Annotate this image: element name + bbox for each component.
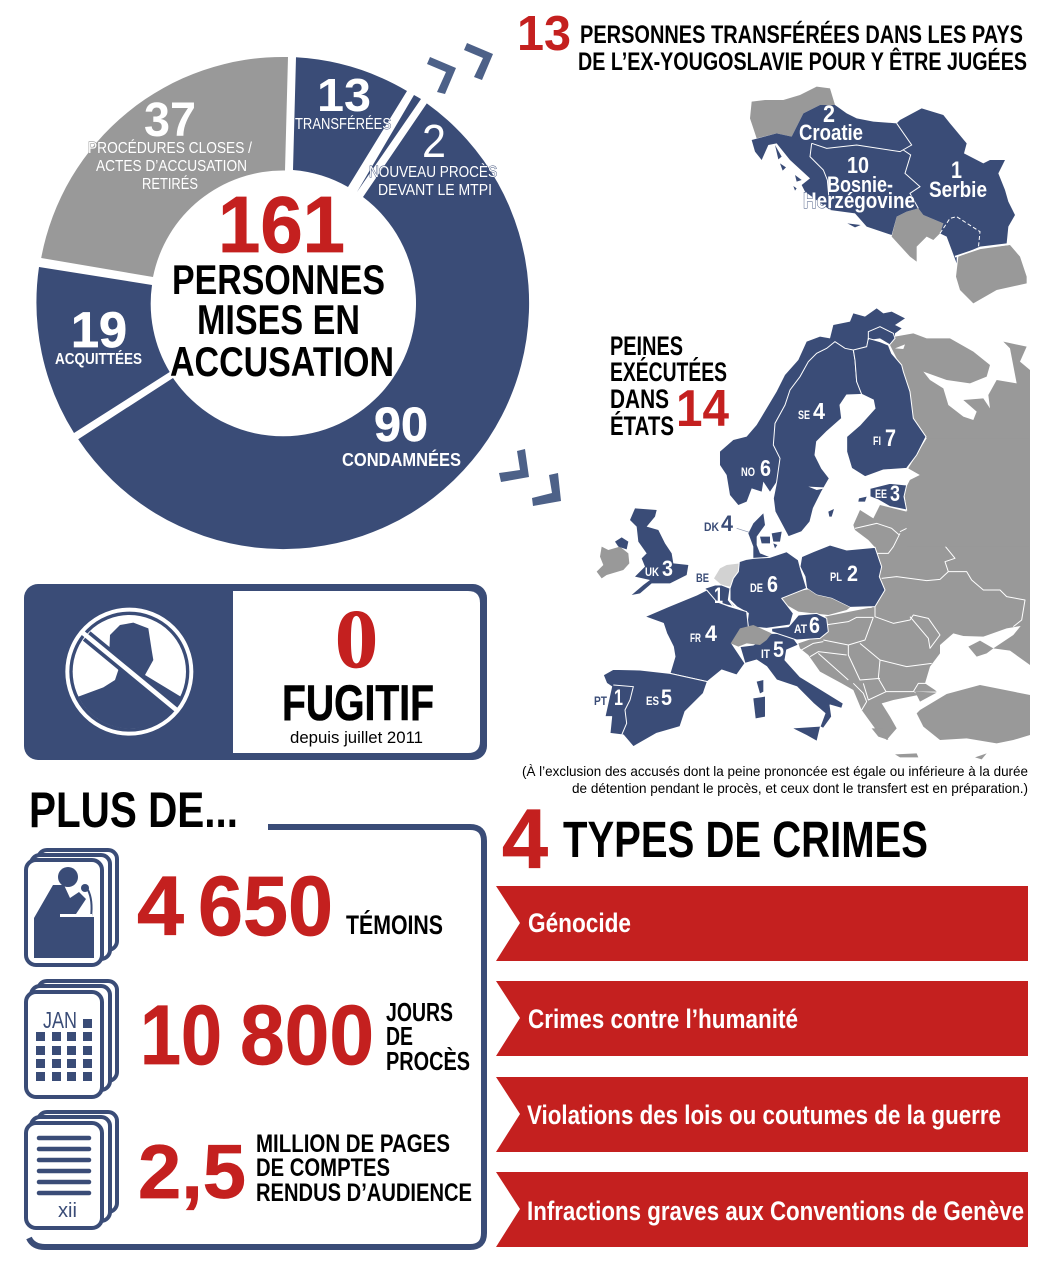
stat: jours de procès — [140, 988, 470, 1082]
country labels: BE — [696, 571, 709, 585]
label: Bosnie-Herzégovine — [803, 152, 915, 213]
country labels: EE — [875, 487, 887, 501]
segment: acquittées — [36, 267, 170, 433]
heading: peines exécutées dans 14 États — [610, 331, 729, 441]
stat: jours de procès: JOURS — [386, 997, 453, 1027]
stat: pages de comptes rendus: MILLION DE PAGES — [256, 1130, 450, 1158]
label: 19: ACQUITTÉES — [55, 349, 142, 368]
label: 19 — [55, 302, 142, 368]
stat: pages de comptes rendus: DE COMPTES — [256, 1154, 390, 1182]
country labels: FI — [873, 434, 881, 448]
label: 37 — [88, 94, 252, 193]
label: 13 — [295, 69, 391, 133]
Estonia — [870, 483, 907, 510]
banner: crimes contre l'humanité — [496, 981, 1028, 1056]
heading: 13 persons transferred: 13 — [517, 7, 571, 61]
label: Serbie: 1 — [951, 157, 962, 184]
label: 19: 19 — [71, 302, 127, 358]
stat: jours de procès: 10 — [140, 988, 222, 1082]
label: 2 — [369, 115, 497, 199]
heading: plus de: PLUS DE... — [29, 782, 238, 838]
segment: transférées — [293, 57, 407, 187]
country labels: 2 — [847, 561, 858, 586]
label: Bosnie-Herzégovine: Herzégovine — [803, 188, 915, 213]
country labels: DE — [750, 581, 763, 595]
country labels: 3 — [662, 556, 673, 581]
country labels — [594, 398, 900, 710]
country labels: 5 — [773, 637, 784, 662]
country labels: FR — [690, 631, 701, 645]
donut chart: 161 persons — [36, 57, 529, 549]
Finland — [847, 338, 926, 477]
stat: pages de comptes rendus — [138, 1130, 472, 1215]
banner: génocide — [496, 886, 1028, 961]
segment: nouveau procès — [357, 95, 421, 192]
country labels: 4 — [813, 398, 825, 424]
stat: témoins: 4 — [137, 859, 184, 953]
country labels: AT — [794, 622, 808, 636]
label: 13: TRANSFÉRÉES — [295, 114, 391, 133]
map: former Yugoslavia — [750, 87, 1027, 303]
stat: témoins — [137, 859, 443, 953]
icon: transcript pages — [26, 1112, 117, 1228]
center total: ACCUSATION — [170, 338, 394, 385]
country labels: PT — [594, 694, 608, 708]
icon: transcript pages: xii — [58, 1200, 77, 1222]
label: 90 — [342, 399, 461, 470]
stat: jours de procès: DE — [386, 1021, 413, 1051]
label: Croatie: 2 — [823, 101, 835, 128]
label: 37: RETIRÉS — [142, 174, 198, 193]
footnote: exclusions — [522, 763, 1028, 796]
country labels: UK — [645, 565, 659, 579]
label: 37: ACTES D’ACCUSATION — [96, 158, 247, 175]
label: 2: DEVANT LE MTPI — [378, 182, 492, 199]
heading: types de crimes: 4 — [502, 792, 548, 886]
label: Croatie — [799, 101, 863, 145]
banner: violations des lois — [496, 1077, 1028, 1152]
label: 90: CONDAMNÉES — [342, 449, 461, 470]
label: 2: NOUVEAU PROCÈS — [369, 162, 497, 181]
heading: peines exécutées dans 14 États: EXÉCUTÉES — [610, 356, 727, 387]
heading: peines exécutées dans 14 États: DANS — [610, 384, 669, 414]
Norway — [720, 308, 905, 505]
country labels: 7 — [885, 425, 896, 452]
Sweden — [773, 342, 863, 537]
label: 37: PROCÉDURES CLOSES / — [88, 138, 252, 157]
heading: types de crimes: TYPES DE CRIMES — [563, 811, 928, 868]
label: 90: 90 — [374, 399, 428, 452]
heading: peines exécutées dans 14 États: ÉTATS — [610, 410, 674, 441]
panel: 0 fugitif — [24, 584, 487, 760]
country labels: 1 — [614, 685, 623, 710]
icon: no fugitive — [67, 610, 191, 734]
country labels: ES — [646, 694, 659, 708]
country labels: SE — [798, 408, 810, 422]
footnote: exclusions: (À l’exclusion des accusés dont la peine prononcée est égale ou inférieure à la durée — [522, 763, 1028, 779]
text: 0 fugitif: depuis juillet 2011 — [290, 728, 423, 747]
stat: jours de procès: PROCÈS — [386, 1046, 470, 1076]
stat: pages de comptes rendus: 2,5 — [138, 1130, 246, 1215]
stat: témoins: TÉMOINS — [346, 909, 443, 940]
banner: génocide: Génocide — [528, 908, 631, 938]
label: Croatie: Croatie — [799, 120, 863, 145]
segment: condamnées — [78, 103, 529, 549]
map: Europe — [594, 308, 1030, 759]
panel: plus de... — [26, 782, 484, 1247]
east Europe gray — [782, 505, 1030, 759]
panel: 4 types de crimes — [496, 792, 1028, 1247]
country labels: 3 — [890, 481, 900, 506]
country labels: 4 — [721, 511, 734, 536]
label: 2: 2 — [422, 115, 446, 167]
country labels: 4 — [705, 621, 718, 646]
country labels: IT — [761, 647, 771, 661]
country labels: 6 — [760, 455, 771, 481]
icon: calendar: JAN — [43, 1007, 77, 1033]
Scandinavia and Russia — [720, 308, 1030, 547]
text: 0 fugitif: 0 — [335, 593, 378, 686]
center total: MISES EN — [197, 296, 360, 343]
heading: peines exécutées dans 14 États: 14 — [676, 380, 729, 438]
segment: procédures closes — [41, 57, 288, 277]
west Europe — [597, 508, 843, 747]
arrow: chevrons toward Europe map — [499, 449, 561, 506]
footnote: exclusions: de détention pendant le procès, et ceux dont le transfert est en préparation.) — [572, 780, 1028, 796]
country labels: DK — [704, 520, 719, 534]
center total — [170, 180, 394, 385]
label: Serbie — [929, 157, 987, 202]
label: 37: 37 — [144, 94, 196, 147]
Czech Republic — [782, 589, 850, 615]
label: Serbie: Serbie — [929, 177, 987, 202]
icon: calendar — [26, 981, 117, 1097]
text: 0 fugitif — [282, 593, 434, 747]
country labels: 6 — [809, 612, 820, 638]
text: 0 fugitif: FUGITIF — [282, 675, 434, 731]
stat: jours de procès: 800 — [240, 988, 374, 1082]
center total: 161 — [218, 180, 345, 269]
center total: PERSONNES — [172, 256, 385, 303]
country labels: NO — [741, 465, 755, 479]
stat: témoins: 650 — [198, 859, 333, 953]
Poland — [800, 545, 885, 607]
country labels: PL — [830, 570, 842, 584]
label: Bosnie-Herzégovine: 10 — [847, 152, 869, 178]
country labels: 1 — [714, 583, 723, 608]
country labels: 5 — [661, 685, 672, 710]
stat: pages de comptes rendus: RENDUS D’AUDIENCE — [256, 1179, 472, 1207]
country labels: 6 — [767, 571, 778, 597]
icon: witness — [26, 850, 117, 965]
heading: types de crimes — [502, 792, 928, 886]
heading: 13 persons transferred — [517, 7, 1027, 76]
arrow: chevrons toward former Yugoslavia — [427, 43, 493, 94]
banner: crimes contre l'humanité: Crimes contre l’humanité — [528, 1004, 798, 1034]
heading: peines exécutées dans 14 États: PEINES — [610, 331, 683, 361]
label: Bosnie-Herzégovine: Bosnie- — [827, 172, 893, 197]
label: 13: 13 — [317, 69, 371, 121]
banner: infractions graves — [496, 1172, 1028, 1247]
